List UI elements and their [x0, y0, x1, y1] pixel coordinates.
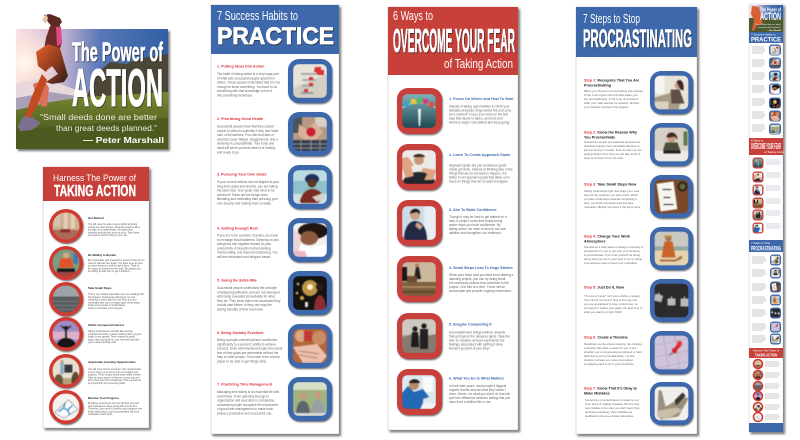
mini Overcome Your Fear section: 6 Ways to: [751, 138, 764, 142]
step: Appreciate Learning Opportunities: an opportunity for personal growth.: [88, 382, 126, 385]
step 6: Deadlines are the stress-inducing, but creating: [584, 342, 642, 346]
step 7: feedback to choose a better alternative.: [585, 414, 634, 418]
step: Monitor Your Progress: Therefore, you need to monitor your progress over: [88, 408, 143, 410]
mini cover: than great deeds planned.”: [758, 26, 781, 29]
step: Monitor Your Progress: [49, 390, 143, 424]
habit 3: the slow road. Your goals may need to be: [217, 189, 275, 193]
step 2: [583, 123, 693, 166]
habit 1: [217, 59, 332, 103]
habit 3: achieved! These are the things more: [217, 193, 268, 197]
step: Monitor Your Progress: motivation levels fresh.: [88, 413, 113, 416]
habit 3: long-term goals and dreams, you are taking: [217, 184, 278, 188]
step 1: Procrastinating: [584, 83, 611, 87]
step 4: Step 4: Change Your Work: [584, 234, 630, 238]
way 3: 3. Aim To Build Confidence: [449, 208, 497, 212]
step: Monitor Your Progress: By taking small steps and you will find your self: [88, 402, 139, 405]
step: Utilize Compound Interest: [49, 317, 142, 351]
way 6: In their later years, most people's biggest: [449, 384, 506, 388]
step 7: Step 7: Know That It's Okay to: [584, 386, 637, 390]
cover quote: [40, 113, 164, 145]
header: 7 Steps to Stop: [583, 12, 640, 26]
mini Procrastinating section: 7 Steps to Stop: [751, 241, 771, 245]
habit 4: 4. Getting Enough Rest: [217, 226, 259, 230]
habit 6: [217, 324, 332, 368]
way 4: daunting project, you can try doing small: [449, 277, 506, 281]
way 6: regrets revolve around what they haven't: [449, 388, 506, 392]
cover title: The Power of: [72, 37, 164, 67]
mini Taking Action section: TAKING ACTION: [755, 353, 777, 358]
text: ACTION: [72, 59, 163, 118]
step: Utilize Compound Interest: compound interest. It starts slowly at first, yet you: [88, 333, 142, 336]
step: Get Started: beautiful and big they turn out to be. Take those: [88, 231, 140, 234]
step 2: Step 2: Know the Reason Why: [584, 130, 637, 134]
step: Appreciate Learning Opportunities: [49, 354, 142, 388]
habit 5: of delayed gratification and are not obsessed: [217, 290, 280, 294]
panel: 7 Steps to Stop Procrastinating: [576, 7, 697, 434]
step: Be Willing to Restart: the steps as lessons for the work. Be patient and: [88, 267, 141, 270]
step 2: You Procrastinate: [584, 135, 615, 139]
mini cover: “Small deeds done are better: [755, 23, 781, 26]
habit 6: significantly to a person's ability to achieve: [217, 342, 276, 346]
step: Get Started: You will never be able to accomplish anything: [88, 223, 138, 226]
habit 1: enough to know something. You have to do: [217, 85, 277, 89]
habit 7: of good time management to make each: [217, 407, 273, 411]
habit 2: Successful people know that they cannot: [217, 124, 274, 128]
mini footer: [749, 423, 783, 432]
habit 6: 6. Being Socially Excellent: [217, 331, 264, 335]
step: Be Willing to Restart: Be comfortable and prepared to restart if that you do: [88, 259, 145, 262]
way 3: taking action, we learn to trust in our own: [449, 227, 506, 231]
way 5: Accomplishment brings intrinsic rewards: [449, 331, 505, 335]
step 4: Sometimes it work takes a change of scenery or: [584, 245, 644, 249]
habit 2: and ready to go.: [217, 150, 240, 154]
mini cover: [749, 5, 783, 32]
habit 3: 3. Pursuing Your Own Goals: [217, 172, 266, 176]
step 2: Sometimes people procrastinate because the: [584, 140, 641, 144]
way 2: focus on things that we do want to happen.: [449, 180, 509, 184]
step 3: beyond the paralysis you were stuck. When: [584, 193, 638, 197]
habit 4: [217, 218, 332, 262]
step 6: Step 6: Create a Timeline: [584, 335, 628, 339]
way 2: things that we do not want to happen, it is: [449, 172, 507, 176]
habit 7: Managing time wisely is an essential life skill: [217, 390, 279, 394]
step: Appreciate Learning Opportunities: You will come first to succeed in the opportunities: [88, 368, 142, 371]
step 5: The current moment in time is the only one: [584, 298, 637, 302]
panel: Harness The Power of Taking Action: [43, 167, 149, 428]
habit 1: 1. Putting Ideas Into Action: [217, 64, 265, 68]
cover quote: — Peter Marshall: [83, 136, 164, 145]
panel: combined long infographic: [749, 4, 785, 432]
habit 2: [217, 112, 332, 156]
step 3: you take small steps towards completing a: [584, 197, 637, 201]
panel: book cover The Power of Action: [0, 14, 168, 149]
step 2: task that requires their immediate attention is: [584, 144, 640, 148]
way 6: 6. What You Do Is What Matters: [449, 376, 504, 380]
mini Overcome Your Fear section: [749, 138, 785, 234]
habit 1: The habit of taking action is a very large part: [217, 72, 279, 76]
mini Practice section: PRACTICE: [751, 37, 781, 44]
habit 3: If your current actions are not aligned to your: [217, 180, 279, 184]
header: [576, 7, 697, 57]
step: Appreciate Learning Opportunities: this is how you find a challenge in the success as: [88, 379, 142, 382]
habit 4: If you are to be a person of action, you have: [217, 234, 279, 238]
step: Be Willing to Restart: as many times you need to get it done. Think of: [88, 264, 139, 268]
step: Get Started: unless you start doing it. All great results in life a-: [88, 226, 141, 229]
step: Appreciate Learning Opportunities: Appreciate Learning Opportunities: [88, 360, 136, 364]
header: 7 Success Habits to: [217, 8, 298, 23]
step: Be Willing to Restart: be willing to start over to get it finished.: [88, 270, 130, 273]
habit 5: they do. They know that to be successful they: [217, 299, 281, 303]
step: Monitor Your Progress: Monitor Your Progress: [88, 396, 119, 400]
habit 7: at all times. From planning through to: [217, 394, 269, 398]
mini cover: The Power of: [760, 8, 781, 14]
habit 6: help of other people. They have to be a team: [217, 355, 280, 359]
step: Take Small Steps: eventually take you to a larger goal. Small steps: [88, 301, 141, 304]
habit 7: organization and execution to completion,: [217, 399, 275, 403]
step 4: [584, 227, 693, 270]
way 5: Remind yourself of your why!: [449, 347, 490, 351]
cover quote: than great deeds planned.”: [56, 124, 157, 133]
step 5: [584, 279, 693, 322]
step: Utilize Compound Interest: Taking small steps is actually like earning: [88, 330, 133, 333]
way 1: 1. Focus On Where and How To Start: [449, 97, 514, 101]
mini cover: — Peter Marshall: [767, 29, 781, 32]
way 3: abilities and strengthen our resilience.: [449, 231, 502, 235]
step 1: habit your main attention to develop. Monitor: [584, 101, 639, 105]
step 3: task, you build momentum and increase: [584, 201, 634, 205]
step: Take Small Steps: today to complete your big goal.: [88, 307, 123, 310]
step: Monitor Your Progress: well motivated to keep going with your to do's.: [88, 405, 138, 408]
header: of Taking Action: [444, 57, 513, 71]
habit 5: lasting benefits of their hard work.: [217, 308, 264, 312]
header: TAKING ACTION: [54, 183, 136, 200]
step: Take Small Steps: big projects. Small steps will propel you into: [88, 296, 136, 299]
mini Procrastinating section: [749, 240, 783, 344]
way 1: Instead of taking opportunities to climb your: [449, 105, 510, 109]
mini Practice section: 7 Success Habits to: [751, 32, 776, 36]
habit 5: should start before or they can reap the: [217, 303, 272, 307]
text: OVERCOME YOUR FEAR: [393, 22, 515, 59]
step 7: Sometimes, procrastination is fueled by our: [585, 398, 639, 402]
way 2: inside got done. Instead of thinking also in the: [449, 168, 513, 172]
mini Taking Action section: [749, 348, 783, 422]
way 4: When your fears hold you back from starting a: [449, 273, 513, 277]
step 5: Step 5: Just Do It, Now: [584, 285, 624, 289]
mini Practice section: [749, 32, 783, 134]
step 4: it somewhere else to boost your motivation.: [584, 261, 638, 265]
habit 5: with being rewarded immediately for what: [217, 295, 275, 299]
step 6: timeline motivate you move more about: [584, 358, 633, 362]
runner silhouette: [18, 14, 68, 131]
way 1: step that needs to taken, and here and: [449, 117, 503, 121]
habit 7: phase a productive and successful one.: [217, 412, 272, 416]
way 6: done. Words, it's what you didn't do that will: [449, 392, 510, 396]
step 7: inner fears of making mistakes. But the only: [585, 402, 640, 406]
step: Take Small Steps: [49, 282, 144, 316]
habit 6: fine of their goals are achievable without the: [217, 351, 279, 355]
step: Be Willing to Restart: Be Willing to Restart: [88, 253, 116, 257]
way 1: [397, 88, 514, 134]
step 5: you are guaranteed to have control over, so: [584, 302, 638, 306]
habit 5: [217, 271, 332, 315]
step: Utilize Compound Interest: you to other exciting ends.: [88, 341, 117, 344]
step 4: doing what you are to your best to try, try doing: [584, 257, 643, 261]
step 7: real mistake is the ones you don't learn from: [585, 406, 640, 410]
way 4: 4. Small Steps Lead To Huge Strides: [449, 266, 513, 270]
step: Get Started: lso take on a modest start, no matter how: [88, 228, 133, 232]
step 7: and keep repeating. View mistakes as: [585, 410, 633, 414]
step: Take Small Steps: momentum and it also lets you keep at it and: [88, 298, 137, 302]
step: Monitor Your Progress: those small steps, each accomplished will keep: [88, 410, 140, 413]
habit 1: others. These people understand that it is not: [217, 81, 280, 85]
mini Taking Action section: Harness The Power of: [753, 349, 779, 353]
way 5: feelings associated with getting it done.: [449, 343, 504, 347]
step 2: putting things off so that you can also think of: [584, 152, 640, 156]
step 1: of the most urgent and important tasks, you: [584, 93, 638, 97]
way 1: fantastic progress, forget about the end zone: [449, 109, 512, 113]
step 1: Step 1: Recognize That You Are: [584, 78, 639, 82]
habit 5: Successful people understand the principle: [217, 286, 277, 290]
step: Utilize Compound Interest: steps, then big blocks in your time will help take: [88, 338, 140, 341]
cover title: [72, 37, 164, 118]
step 1: your behavior and learn the triggers.: [584, 105, 629, 109]
way 6: spell the difference between feeling that you: [449, 396, 510, 400]
step: Get Started: you want to do first thing in your day.: [88, 234, 128, 237]
step 3: [584, 175, 693, 218]
step 1: are procrastinating. If this is an unconscious: [584, 97, 639, 101]
habit 7: successful people recognize the importance: [217, 403, 278, 407]
habit 1: of what sets successful people apart from: [217, 76, 275, 80]
habit 7: 7. Practicing Time Management: [217, 382, 273, 386]
habit 4: doing less can negative impact on your: [217, 242, 271, 246]
habit 4: will feel exhausted and fatigued easier.: [217, 255, 271, 259]
step: Appreciate Learning Opportunities: as you move up in and you do not neglect your: [88, 371, 139, 374]
step 5: as long as it makes your goals, the best time to: [584, 306, 643, 310]
header: [43, 167, 149, 201]
way 6: have lived a fulfilled life or not.: [449, 400, 491, 404]
way 2: [397, 144, 513, 190]
step 4: atmosphere for you to get over your tendency: [584, 249, 641, 253]
header: PRACTICE: [217, 23, 334, 50]
way 2: 2. Learn To Create Approach Goals: [449, 153, 510, 157]
habit 6: success. Even well-intended people who rarely: [217, 347, 283, 351]
habit 3: [217, 165, 332, 209]
habit 2: mind will serve you best when it is healthy: [217, 146, 276, 150]
way 3: active helps you build confidence. By: [449, 223, 501, 227]
step 3: Step 3: Take Small Steps Now: [584, 182, 636, 186]
step: Take Small Steps: today and a couple of small things: [88, 304, 126, 307]
step 3: motivation. Before you know it the job is done.: [584, 205, 641, 209]
habit 2: expect to perform optimally if they don't take: [217, 129, 279, 133]
step 7: Make Mistakes: [584, 391, 610, 395]
step: Get Started: Get Started: [88, 216, 104, 220]
panel: 6 Ways to Overcome Your Fear: [388, 7, 518, 430]
habit 2: tendency to procrastinate. Your body and: [217, 142, 274, 146]
step 1: [584, 71, 693, 114]
step: Take Small Steps: Take Small Steps: [88, 286, 112, 290]
habit 2: 2. Prioritizing Good Health: [217, 117, 264, 121]
way 5: [397, 313, 510, 359]
habit 6: Being a people-oriented person contributes: [217, 338, 277, 342]
way 6: [397, 369, 510, 415]
habit 4: mental clarity, and memory functioning. You: [217, 251, 278, 255]
way 2: Approach goals are just 'avoidance goals': [449, 164, 507, 168]
step: Utilize Compound Interest: begin to see growth. Time invested in small: [88, 336, 135, 338]
step: Be Willing to Restart: [49, 246, 145, 280]
way 4: [397, 256, 513, 302]
habit 1: into something beneficial.: [217, 94, 253, 98]
step 4: Atmosphere: [584, 239, 606, 243]
habit 5: 5. Going the Extra Mile: [217, 278, 257, 282]
habit 6: player to be able to get things done.: [217, 360, 267, 364]
habit 1: something with that knowledge to turn it: [217, 89, 272, 93]
step 4: to procrastinate. If you find yourself not doing: [584, 253, 640, 257]
header: Harness The Power of: [53, 173, 136, 184]
way 5: that go beyond the pleasure gains. Take the: [449, 335, 510, 339]
step 5: what you want to is right NOW.: [584, 310, 622, 314]
step: Get Started: [49, 209, 141, 243]
cover photo background: [16, 29, 168, 149]
step 6: [584, 331, 693, 374]
way 3: task or project, know that simply being: [449, 219, 502, 223]
step 6: completing each to do in your timeframe.: [584, 362, 635, 366]
way 2: better to set approach goals that allow us to: [449, 176, 510, 180]
step 6: back due to your procrastination. Let this: [584, 354, 635, 358]
step 7: [584, 382, 693, 425]
habit 3: liberating and motivating than pursuing your: [217, 197, 278, 201]
step: Appreciate Learning Opportunities: Take as many pieces of lessons as you can and: [88, 376, 140, 379]
step 6: a timeline will make it easier for you to see: [584, 346, 637, 350]
step 2: ways to counter it from the start.: [584, 156, 624, 160]
habit 3: own dreams and making them a reality.: [217, 202, 272, 206]
step: Take Small Steps: This is very helpful especially if you are dealing with: [88, 293, 144, 296]
habit 7: [217, 377, 332, 421]
header: [388, 7, 518, 75]
habit 2: care of themselves. Poor diet and lack of: [217, 133, 274, 137]
way 5: 5. Imagine Completing It: [449, 322, 492, 326]
step 5: "It's now or never" isn't just a cliché or slogan.: [584, 294, 641, 298]
step 3: Taking small steps right now helps you move: [584, 189, 640, 193]
step 6: whether you're progressing as planned or hard: [584, 350, 642, 354]
step: Appreciate Learning Opportunities: projects. These unique small steps make it better.: [88, 374, 142, 376]
mini Overcome Your Fear section: of Taking Action: [764, 150, 785, 154]
step: Be Willing to Restart: need to start all over again. You have to be as sure: [88, 262, 144, 265]
step: Utilize Compound Interest: Utilize Compound Interest: [88, 323, 124, 327]
habit 2: exercise cause fatigue, sluggishness, and a: [217, 137, 278, 141]
way 1: for a moment. Focus your mind on the first: [449, 113, 508, 117]
habit 4: to recharge those batteries. Sleeping on and: [217, 238, 279, 242]
step 2: just too boring or trouble. Find out why you are: [583, 148, 642, 152]
header: [211, 5, 339, 54]
way 3: Though it may be hard to get started on a: [449, 215, 507, 219]
panel: 7 Success Habits to Practice: [211, 5, 339, 434]
way 1: where to begin. Get started and keep going.: [449, 121, 510, 125]
way 4: project. One bite at a time. These will all: [449, 285, 505, 289]
cover quote: “Small deeds done are better: [40, 113, 157, 122]
way 4: accumulate and provide ongoing momentum.: [449, 289, 512, 293]
step 1: When you choose to do something else instead: [584, 89, 643, 93]
header: 6 Ways to: [393, 9, 433, 23]
way 4: but necessary actions that contribute to the: [449, 281, 509, 285]
way 3: [397, 200, 507, 246]
habit 4: productivity. A thought-crushed destiny,: [217, 246, 271, 250]
way 5: time to visualize and pre-experience the: [449, 339, 505, 343]
